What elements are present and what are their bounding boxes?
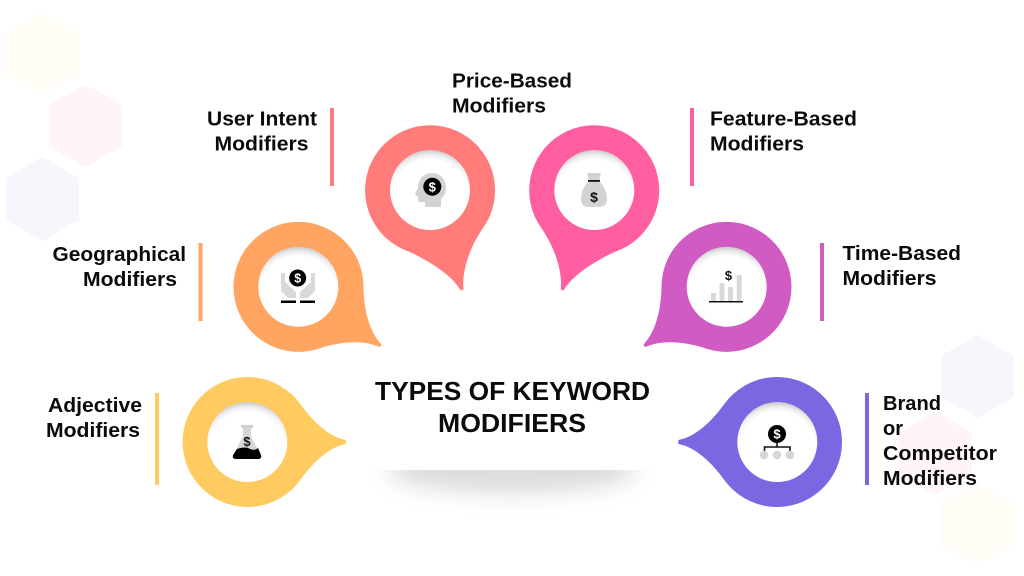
divider: adjective <box>155 393 159 485</box>
label: time-based modifiers: Modifiers <box>842 267 936 290</box>
icon: head with coin <box>415 173 446 207</box>
label: user intent modifiers <box>207 108 317 156</box>
pin: brand or competitor modifiers <box>678 377 842 507</box>
label: user intent modifiers: User Intent <box>207 108 317 131</box>
label: brand or competitor modifiers: Competitor <box>883 442 997 465</box>
label: brand or competitor modifiers: Brand <box>883 392 941 415</box>
label: feature-based modifiers: Modifiers <box>710 133 804 156</box>
label: time-based modifiers: Time-Based <box>842 242 961 265</box>
icon: coin with branches <box>760 425 794 459</box>
background hexagon: cream right <box>941 483 1014 565</box>
pin: time-based modifiers <box>606 196 817 399</box>
label: feature-based modifiers <box>710 108 857 156</box>
pin: adjective modifiers <box>183 377 346 507</box>
divider: user intent <box>330 108 334 186</box>
label: brand or competitor modifiers: or <box>883 417 903 440</box>
label: price-based modifiers: Price-Based <box>452 70 572 93</box>
icon: money bag: $ <box>590 189 598 205</box>
divider: time-based <box>820 243 824 321</box>
title: TYPES OF KEYWORD <box>375 376 650 406</box>
icon: flask: $ <box>243 434 251 449</box>
label: geographical modifiers: Geographical <box>52 243 186 266</box>
divider: brand <box>865 393 869 485</box>
label: price-based modifiers: Modifiers <box>452 95 546 118</box>
background hexagon: cream top left <box>6 12 79 94</box>
label: price-based modifiers <box>452 70 572 118</box>
background hexagon: pink top left <box>49 84 122 167</box>
label: brand or competitor modifiers <box>883 392 997 490</box>
icon: flask <box>233 425 261 459</box>
background hexagon: lavender left <box>6 157 79 241</box>
label: adjective modifiers <box>46 394 142 442</box>
label: geographical modifiers <box>52 243 186 291</box>
background hexagon: lavender right <box>941 335 1014 418</box>
label: feature-based modifiers: Feature-Based <box>710 108 857 131</box>
title <box>375 376 650 438</box>
title: MODIFIERS <box>438 408 586 438</box>
label: adjective modifiers: Modifiers <box>46 419 140 442</box>
background hexagon: pink right <box>899 412 972 495</box>
icon: hands holding a coin: $ <box>294 272 301 286</box>
label: adjective modifiers: Adjective <box>48 394 142 417</box>
label: brand or competitor modifiers: Modifiers <box>883 467 977 490</box>
podium shadow <box>386 470 638 501</box>
pin: price-based modifiers <box>500 108 676 310</box>
pin: user intent modifiers <box>348 108 524 310</box>
pin: geographical modifiers <box>208 196 419 399</box>
icon: hands holding a coin <box>281 270 315 303</box>
label: geographical modifiers: Modifiers <box>83 268 177 291</box>
icon: money bag <box>581 173 607 207</box>
divider: geographical <box>198 243 202 321</box>
divider: feature-based <box>690 108 694 186</box>
icon: rising bars with dollar: $ <box>725 268 733 283</box>
icon: head with coin: $ <box>429 179 437 194</box>
label: user intent modifiers: Modifiers <box>214 133 308 156</box>
label: time-based modifiers <box>842 242 961 290</box>
icon: coin with branches: $ <box>773 427 781 442</box>
icon: rising bars with dollar <box>709 268 743 302</box>
